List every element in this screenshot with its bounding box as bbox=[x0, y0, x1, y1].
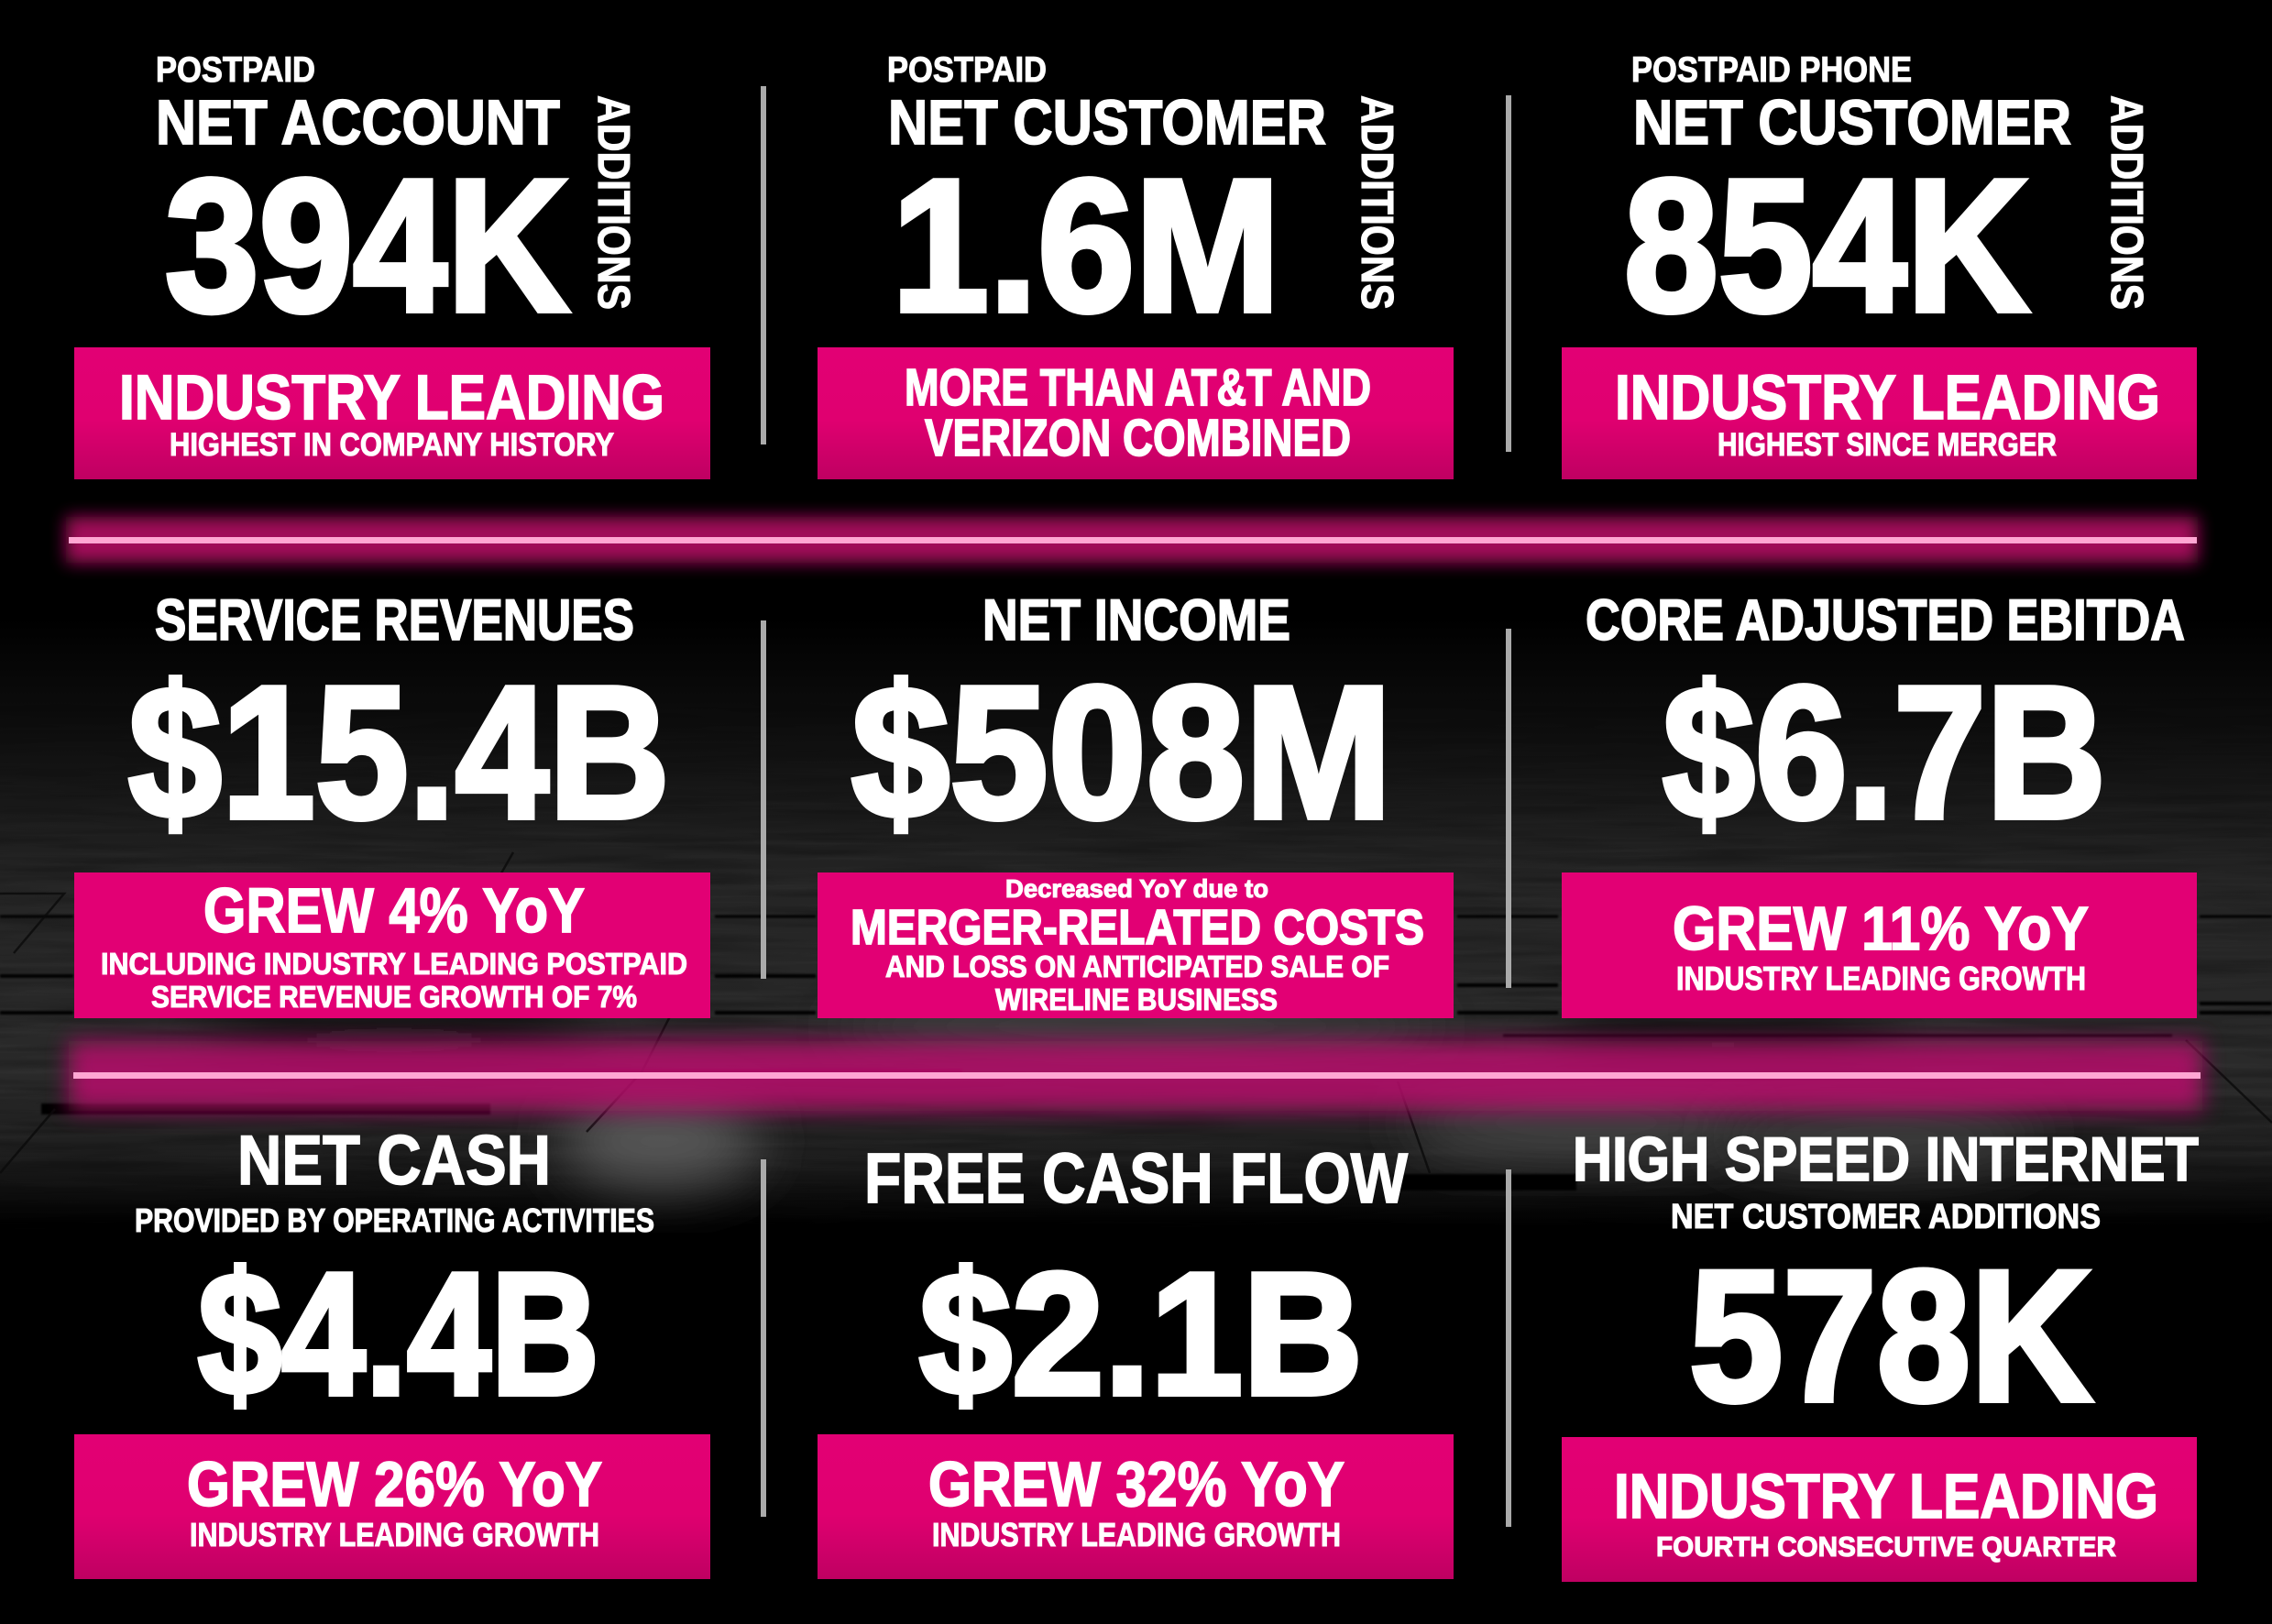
callout box: MERGER-RELATED COSTS bbox=[851, 900, 1424, 955]
heading: high speed internet: HIGH SPEED INTERNET bbox=[1573, 1125, 2199, 1194]
callout box: FOURTH CONSECUTIVE QUARTER bbox=[1656, 1531, 2116, 1563]
heading: service revenues: SERVICE REVENUES bbox=[155, 588, 634, 653]
callout box: INDUSTRY LEADING GROWTH bbox=[932, 1516, 1341, 1553]
callout box: INDUSTRY LEADING GROWTH bbox=[190, 1516, 599, 1553]
callout box: GREW 32% YoY bbox=[928, 1449, 1345, 1520]
subheading: net customer additions: NET CUSTOMER ADDITIONS bbox=[1671, 1198, 2101, 1236]
callout box bbox=[74, 1434, 710, 1579]
panel: postpaid net account additions bbox=[74, 50, 710, 479]
callout box: GREW 4% YoY bbox=[203, 875, 585, 946]
callout box: GREW 26% YoY bbox=[187, 1449, 602, 1520]
background: dark textured floor bbox=[0, 683, 2272, 1223]
neon divider: middle bbox=[69, 1041, 2202, 1111]
panel: core adjusted ebitda bbox=[1562, 588, 2197, 1018]
value: $15.4B: $15.4B bbox=[128, 647, 670, 858]
callout box bbox=[74, 872, 710, 1018]
callout box: HIGHEST IN COMPANY HISTORY bbox=[170, 427, 614, 463]
heading: net account: NET ACCOUNT bbox=[156, 87, 560, 158]
label: postpaid: POSTPAID bbox=[156, 50, 315, 90]
callout box: INDUSTRY LEADING bbox=[1614, 1461, 2158, 1531]
value: $508M: $508M bbox=[851, 647, 1392, 858]
panel: net cash provided by operating activities bbox=[74, 1122, 710, 1579]
value: 578K: 578K bbox=[1689, 1232, 2092, 1441]
heading: free cash flow: FREE CASH FLOW bbox=[864, 1139, 1408, 1218]
panel: free cash flow bbox=[818, 1139, 1454, 1579]
neon divider: top bbox=[66, 517, 2198, 563]
callout box bbox=[1562, 1437, 2197, 1582]
callout box: WIRELINE BUSINESS bbox=[995, 982, 1278, 1016]
panel: high speed internet net customer additions bbox=[1562, 1125, 2199, 1582]
value: $6.7B: $6.7B bbox=[1663, 647, 2106, 858]
callout box: AND LOSS ON ANTICIPATED SALE OF bbox=[885, 949, 1389, 983]
vertical label: additions: ADDITIONS bbox=[2102, 95, 2151, 310]
panel: service revenues bbox=[74, 588, 710, 1018]
heading: net income: NET INCOME bbox=[982, 588, 1290, 653]
value: $2.1B: $2.1B bbox=[919, 1237, 1363, 1432]
label: postpaid phone: POSTPAID PHONE bbox=[1631, 50, 1912, 90]
callout box bbox=[818, 872, 1454, 1018]
callout box: HIGHEST SINCE MERGER bbox=[1718, 427, 2057, 463]
callout box: MORE THAN AT&T AND bbox=[905, 358, 1371, 417]
value: 854K: 854K bbox=[1624, 140, 2029, 351]
callout box bbox=[818, 1434, 1454, 1579]
panel: postpaid phone net customer additions bbox=[1562, 50, 2197, 479]
panel: net income bbox=[818, 588, 1454, 1018]
callout box bbox=[1562, 872, 2197, 1018]
value: $4.4B: $4.4B bbox=[198, 1237, 599, 1432]
heading: net customer: NET CUSTOMER bbox=[888, 87, 1326, 158]
callout box: SERVICE REVENUE GROWTH OF 7% bbox=[151, 980, 637, 1014]
label: postpaid: POSTPAID bbox=[887, 50, 1047, 90]
callout box bbox=[1562, 347, 2197, 479]
value: 394K: 394K bbox=[165, 140, 569, 351]
callout box bbox=[818, 347, 1454, 479]
callout box: INDUSTRY LEADING GROWTH bbox=[1676, 960, 2086, 997]
vertical label: additions: ADDITIONS bbox=[588, 95, 638, 310]
vertical label: additions: ADDITIONS bbox=[1352, 95, 1401, 310]
value: 1.6M: 1.6M bbox=[892, 140, 1280, 351]
callout box: INCLUDING INDUSTRY LEADING POSTPAID bbox=[101, 947, 687, 981]
heading: net customer: NET CUSTOMER bbox=[1633, 87, 2071, 158]
callout box: INDUSTRY LEADING bbox=[119, 362, 664, 433]
heading: net cash: NET CASH bbox=[237, 1122, 551, 1200]
callout box: VERIZON COMBINED bbox=[925, 409, 1351, 467]
callout box: Decreased YoY due to bbox=[1005, 874, 1268, 903]
callout box: GREW 11% YoY bbox=[1673, 894, 2089, 963]
subheading: provided by operating activities: PROVIDED BY OPERATING ACTIVITIES bbox=[135, 1202, 654, 1239]
vertical dividers bbox=[761, 86, 1511, 1527]
callout box: INDUSTRY LEADING bbox=[1615, 362, 2160, 433]
callout box bbox=[74, 347, 710, 479]
panel: postpaid net customer additions bbox=[818, 50, 1454, 479]
